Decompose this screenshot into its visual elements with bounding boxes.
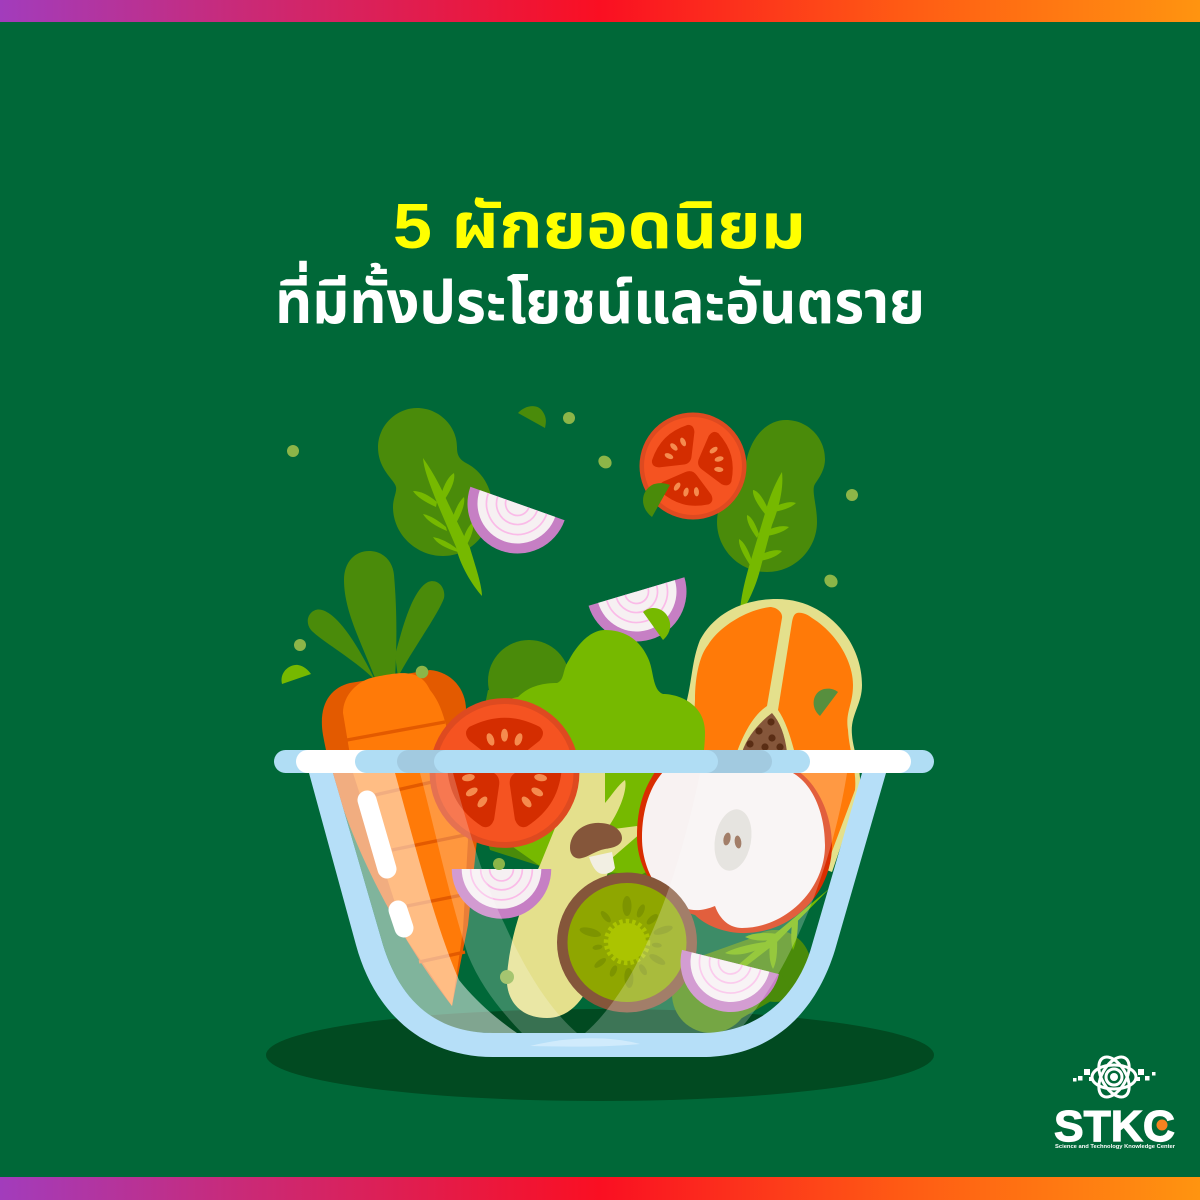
small leaf on tomato <box>643 483 670 517</box>
onion slice top left <box>454 487 565 567</box>
onion slice bottom right <box>670 950 779 1023</box>
top gradient bar <box>0 0 1200 22</box>
onion slice middle <box>589 577 699 654</box>
parsnip root <box>507 773 641 1018</box>
STKC logo <box>1054 1052 1176 1151</box>
bowl shadow <box>266 1009 934 1101</box>
papaya half <box>687 599 862 872</box>
spinach leaf top right <box>717 420 825 615</box>
left glass highlight <box>333 773 517 1033</box>
carrot <box>308 551 477 1006</box>
wall shine top <box>367 800 387 869</box>
floating dots <box>287 412 858 651</box>
spinach leaf top left <box>378 408 492 596</box>
small leaf on papaya <box>814 689 838 716</box>
bowl wall <box>309 773 886 1057</box>
tomato slice top <box>640 412 746 520</box>
dot on carrot <box>416 666 428 678</box>
logo orange dot <box>1156 1120 1168 1130</box>
title line two: ที่มีทั้งประโยชน์และอันตราย <box>275 260 925 336</box>
spinach leaf in bowl <box>672 888 830 1033</box>
logo tagline: Science and Technology Knowledge Center <box>1055 1144 1176 1150</box>
middle glass highlight <box>420 773 577 1033</box>
title <box>275 190 925 336</box>
glass highlights <box>333 773 847 1033</box>
right glass highlight <box>585 773 847 1033</box>
onion slice in bowl <box>452 869 551 919</box>
logo atom icon <box>1073 1052 1156 1102</box>
title line one: 5 ผักยอดนิยม <box>393 190 806 262</box>
bottom gradient bar <box>0 1177 1200 1200</box>
apple half <box>637 759 832 933</box>
floating leaf pieces <box>281 406 546 684</box>
glass bowl <box>274 750 934 1057</box>
carrot greens <box>308 551 444 680</box>
bowl rim <box>274 750 934 773</box>
wall shine bottom <box>398 910 404 928</box>
tomato slice big <box>430 698 579 848</box>
small leaf on onion <box>643 608 670 640</box>
lettuce <box>470 630 705 875</box>
bowl bottom sheen <box>530 1038 640 1047</box>
dark lettuce behind <box>470 640 740 880</box>
kiwi slice <box>557 872 697 1012</box>
logo wordmark: STKC <box>1054 1102 1175 1151</box>
dots in bowl <box>493 858 514 984</box>
mushroom <box>570 823 622 874</box>
